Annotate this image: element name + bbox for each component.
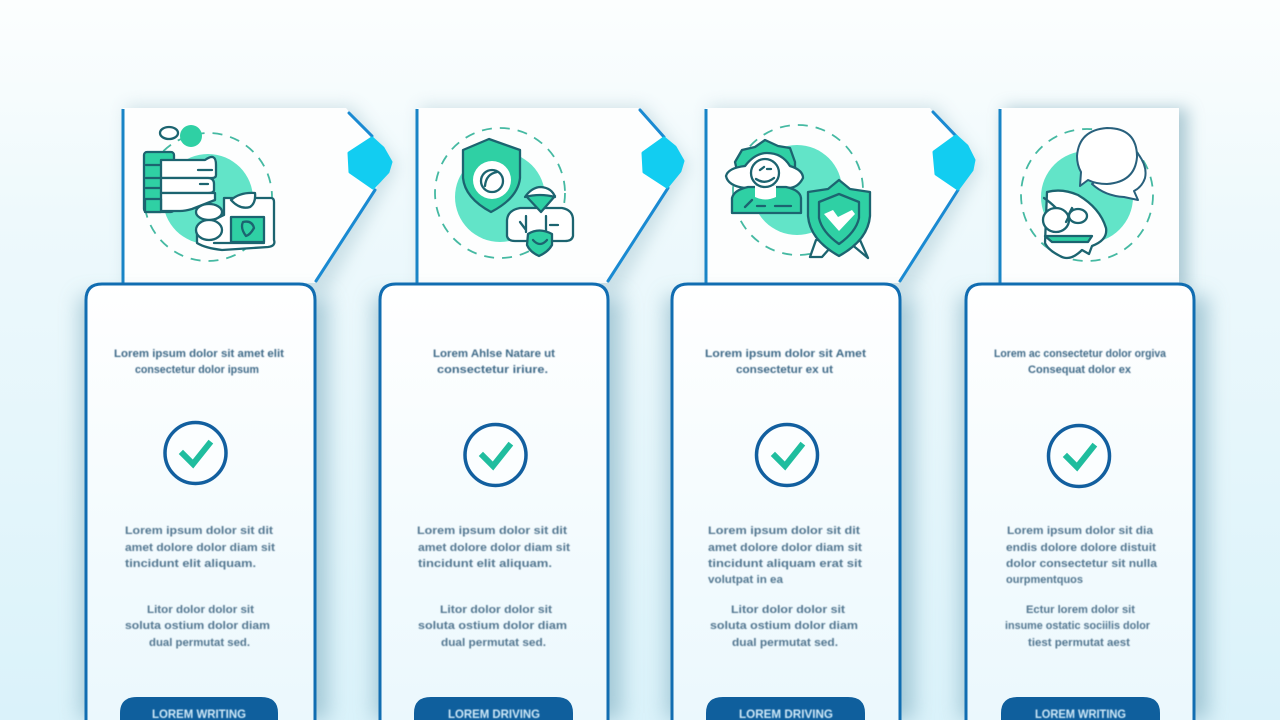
paragraph 4a: Lorem ipsum dolor sit dia [1007, 525, 1154, 537]
paragraph 4b: Ectur lorem dolor sit [1026, 604, 1135, 616]
card 3: amet dolore dolor diam sit [708, 542, 862, 554]
card 4: insume ostatic sociilis dolor [1005, 620, 1151, 632]
panel: icon header 2 [417, 106, 690, 294]
card 2: consectetur iriure. [437, 364, 548, 376]
heading 2: Lorem Ahlse Natare ut [433, 348, 555, 360]
icon: person badge and shield [726, 125, 870, 258]
card 1: consectetur dolor ipsum [135, 364, 259, 376]
card 2 [374, 284, 622, 720]
card 4: ourpmentquos [1006, 574, 1083, 586]
icon: hexagon connector 3 [934, 136, 974, 189]
card 3: volutpat in ea [708, 574, 784, 586]
button 4 [1001, 697, 1160, 720]
column 4 [960, 108, 1208, 720]
card 4: Consequat dolor ex [1028, 364, 1132, 376]
card 4 [960, 284, 1208, 720]
card 1: dual permutat sed. [149, 637, 250, 649]
card 1: soluta ostium dolor diam [125, 620, 270, 632]
paragraph 3a: Lorem ipsum dolor sit dit [708, 525, 860, 537]
card 2: dual permutat sed. [441, 637, 546, 649]
check mark 4 [1048, 426, 1110, 486]
card 2: tincidunt elit aliquam. [418, 558, 552, 570]
card 3: consectetur ex ut [736, 364, 833, 376]
icon: hands and document [144, 125, 274, 261]
card 1: amet dolore dolor diam sit [125, 542, 275, 554]
check mark 2 [465, 424, 526, 486]
column 1 [80, 106, 398, 720]
card 2: amet dolore dolor diam sit [418, 542, 570, 554]
paragraph 3b: Litor dolor dolor sit [731, 604, 845, 616]
paragraph 2a: Lorem ipsum dolor sit dit [417, 525, 567, 537]
check mark 1 [165, 422, 226, 484]
icon: hexagon connector 2 [643, 138, 683, 187]
card 4: dolor consectetur sit nulla [1006, 558, 1158, 570]
button 1 [120, 697, 278, 720]
check mark 3 [756, 424, 818, 486]
icon: shield and person [435, 128, 573, 258]
button 2 [414, 697, 573, 720]
paragraph 2b: Litor dolor dolor sit [440, 604, 552, 616]
button 3 [706, 697, 865, 720]
column 3 [666, 106, 981, 720]
card 3: dual permutat sed. [732, 637, 838, 649]
card 4: endis dolore dolore distuit [1006, 542, 1156, 554]
heading 1: Lorem ipsum dolor sit amet elit [114, 348, 284, 360]
paragraph 1a: Lorem ipsum dolor sit dit [125, 525, 273, 537]
card 3 [666, 284, 914, 720]
panel: icon header 3 [706, 106, 981, 294]
card 3: tincidunt aliquam erat sit [708, 558, 862, 570]
icon: hexagon connector 1 [349, 138, 391, 188]
heading 3: Lorem ipsum dolor sit Amet [705, 348, 866, 360]
panel: icon header 4 [1000, 108, 1188, 294]
card 1 [80, 284, 328, 720]
icon: speech bubbles and hand [1021, 128, 1153, 261]
card 2: soluta ostium dolor diam [418, 620, 567, 632]
panel: icon header 1 [123, 106, 398, 294]
column 2 [374, 106, 690, 720]
card 4: tiest permutat aest [1028, 637, 1130, 649]
paragraph 1b: Litor dolor dolor sit [147, 604, 254, 616]
card 3: soluta ostium dolor diam [710, 620, 858, 632]
heading 4: Lorem ac consectetur dolor orgiva [994, 348, 1167, 360]
card 1: tincidunt elit aliquam. [125, 558, 256, 570]
